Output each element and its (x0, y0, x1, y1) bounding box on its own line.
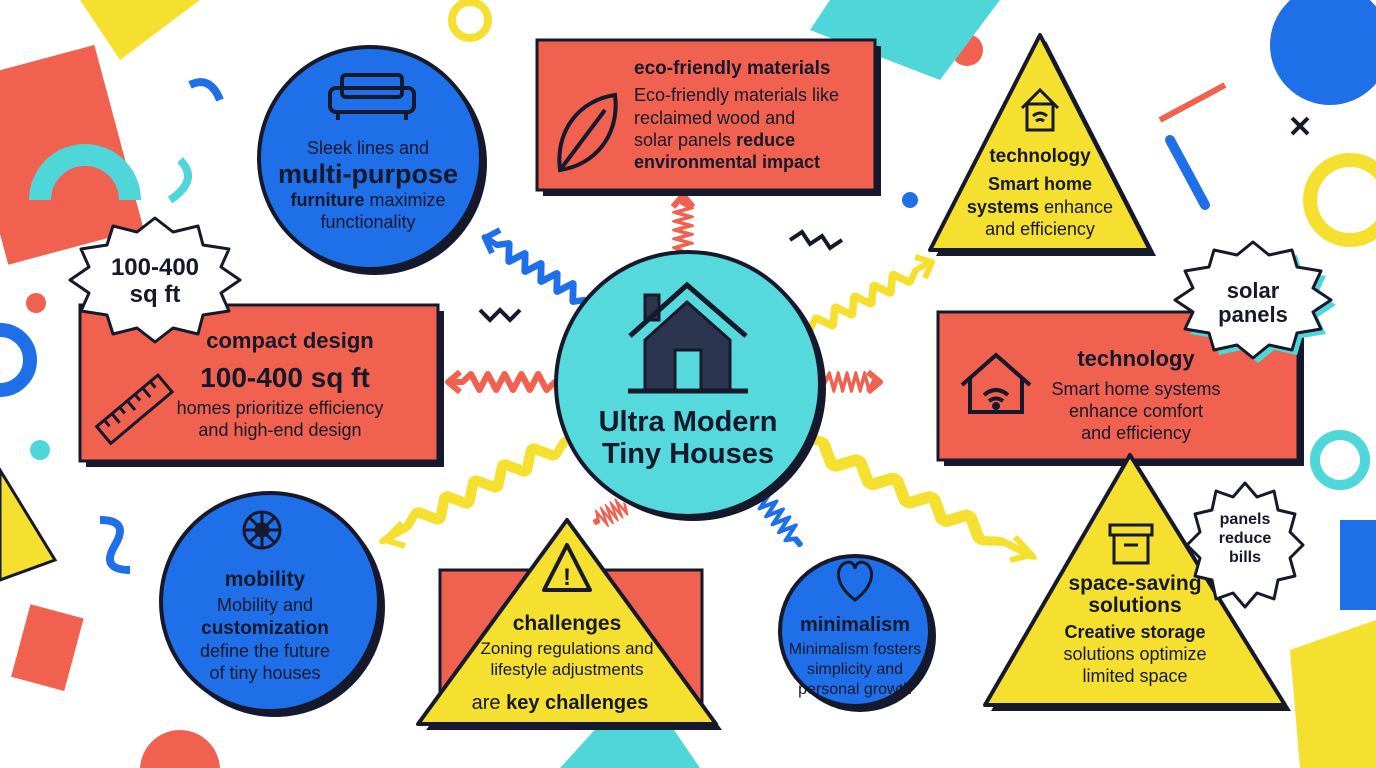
panel: challenges: challenges (513, 612, 621, 635)
starburst: panels reduce bills: bills (1229, 549, 1261, 566)
center hub (556, 252, 826, 521)
panel: minimalism: personal growth (798, 681, 912, 698)
panel: space-saving solutions: space-saving (1068, 572, 1202, 595)
panel: multi-purpose furniture: functionality (320, 212, 416, 232)
panel: technology triangle: systems enhance (967, 197, 1113, 217)
panel: eco-friendly materials: eco-friendly materials (634, 58, 830, 79)
panel: minimalism: simplicity and (807, 661, 903, 678)
icon: wifi house (962, 355, 1030, 412)
starburst: 100-400 sq ft (70, 218, 240, 342)
starburst: 100-400 sq ft: sq ft (130, 281, 180, 308)
panel: eco-friendly materials: environmental impact (634, 152, 820, 172)
arrowheads (385, 195, 1032, 560)
panel: compact design: and high-end design (198, 420, 362, 440)
icon: wheel (244, 512, 280, 548)
panel: space-saving solutions (985, 455, 1291, 711)
icon: heart (838, 562, 872, 600)
icon: ruler (97, 375, 172, 443)
panel: technology box: Smart home systems (1051, 379, 1221, 399)
panel: space-saving solutions: solutions (1088, 594, 1182, 617)
icon: leaf (559, 95, 616, 170)
panel: mobility: of tiny houses (209, 663, 321, 683)
panel: challenges: are key challenges (472, 692, 648, 714)
arrows (380, 197, 1034, 564)
panel: multi-purpose furniture: multi-purpose (278, 159, 458, 189)
icon: sofa (330, 75, 414, 120)
icon: storage box (1110, 525, 1152, 563)
panel: technology box: enhance comfort (1069, 401, 1203, 421)
panel: mobility: Mobility and (217, 595, 313, 615)
panel: mobility: mobility (225, 568, 306, 591)
icon: warning: ! (563, 564, 571, 591)
starburst: panels reduce bills (1187, 483, 1303, 607)
panel: multi-purpose furniture (259, 47, 487, 275)
panel: compact design: homes prioritize efficiency (177, 398, 383, 418)
panel: multi-purpose furniture: Sleek lines and (307, 138, 429, 158)
starburst: 100-400 sq ft: 100-400 (111, 254, 199, 281)
center hub: Tiny Houses (602, 438, 774, 470)
panel: minimalism: minimalism (800, 614, 910, 636)
panel: technology box (938, 312, 1304, 466)
panel: space-saving solutions: limited space (1082, 666, 1188, 686)
panel: challenges (418, 520, 722, 730)
panel: technology box: technology (1077, 346, 1195, 371)
panel: eco-friendly materials: solar panels reduce (634, 130, 795, 150)
panel: compact design: 100-400 sq ft (200, 362, 370, 393)
panel: mobility: define the future (200, 641, 330, 661)
starburst: solar panels: panels (1218, 302, 1288, 327)
panel: mobility (161, 493, 385, 717)
panel: multi-purpose furniture: furniture maximize (290, 190, 446, 210)
icon: house (628, 285, 748, 391)
panel: challenges: lifestyle adjustments (490, 660, 644, 679)
panel: minimalism (780, 556, 936, 712)
panel: challenges: Zoning regulations and (481, 639, 653, 658)
panel: eco-friendly materials: reclaimed wood and (634, 108, 795, 128)
panel: technology triangle: technology (989, 146, 1091, 167)
panel: eco-friendly materials (537, 40, 881, 196)
panel: technology triangle (930, 35, 1156, 256)
panel: mobility: customization (201, 618, 329, 639)
starburst: solar panels: solar (1227, 278, 1280, 303)
starburst: solar panels (1175, 242, 1336, 363)
icon: smart home (1022, 90, 1058, 130)
icon: warning (544, 545, 590, 591)
panel: eco-friendly materials: Eco-friendly materials like (634, 85, 839, 105)
starburst: panels reduce bills: panels (1220, 511, 1270, 528)
panel: minimalism: Minimalism fosters (789, 641, 921, 658)
panel: technology triangle: and efficiency (985, 219, 1095, 239)
panel: compact design (80, 305, 444, 467)
panel: technology triangle: Smart home (988, 174, 1092, 194)
panel: space-saving solutions: solutions optimize (1063, 644, 1207, 664)
title: Ultra Modern (599, 406, 777, 438)
panel: space-saving solutions: Creative storage (1064, 622, 1206, 642)
panel: compact design: compact design (206, 328, 374, 353)
panel: technology box: and efficiency (1081, 423, 1191, 443)
starburst: panels reduce bills: reduce (1219, 530, 1271, 547)
